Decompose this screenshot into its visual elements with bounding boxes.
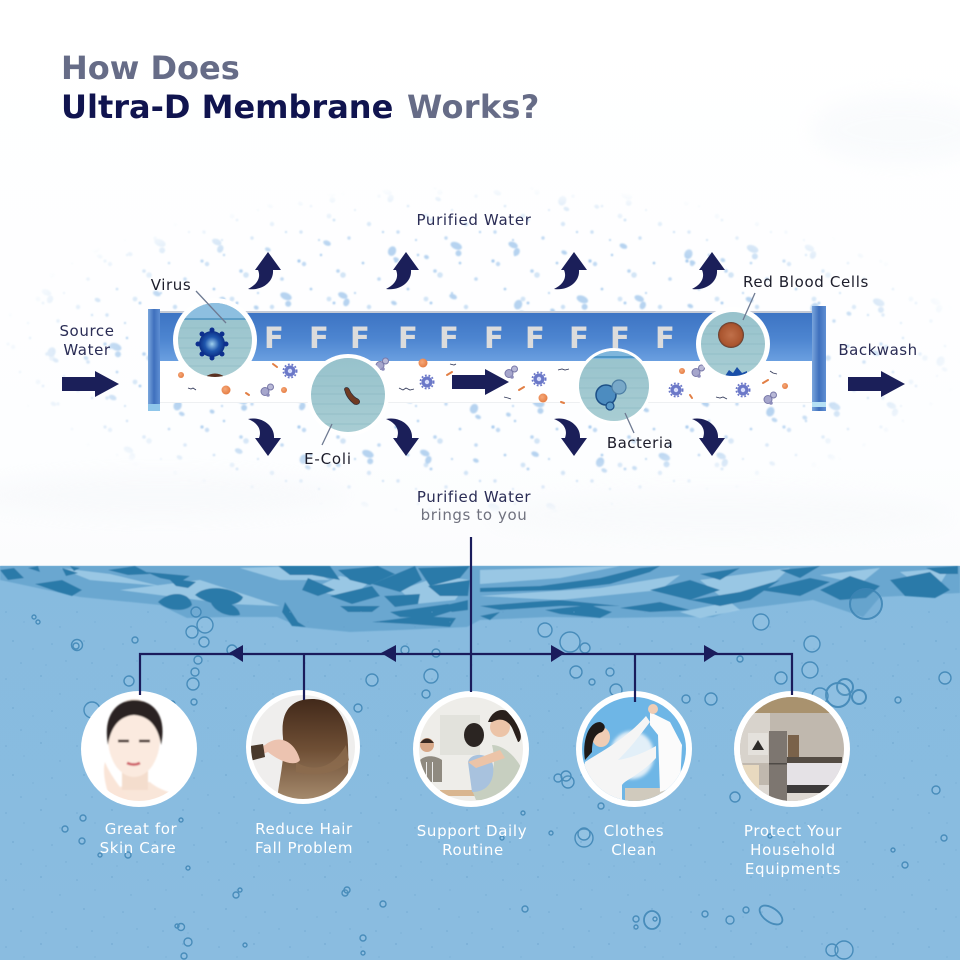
caption: support daily routine: Support Daily bbox=[417, 822, 527, 840]
label: source water: Source bbox=[59, 322, 115, 340]
caption: support daily routine: Routine bbox=[442, 841, 504, 859]
membrane F markers: F bbox=[525, 321, 545, 355]
magnifier: e-coli bbox=[307, 354, 389, 436]
caption: clothes clean: Clean bbox=[611, 841, 657, 859]
membrane F markers: F bbox=[398, 321, 418, 355]
label: source water bbox=[59, 322, 115, 359]
membrane F markers bbox=[264, 321, 675, 355]
caption: protect your household equipments bbox=[744, 822, 842, 878]
water micro speckles bbox=[0, 610, 960, 960]
label: e-coli: E-Coli bbox=[304, 450, 352, 468]
photo: clothes clean bbox=[576, 691, 692, 807]
water bubbles bbox=[32, 589, 951, 959]
caption: protect your household equipments: Household bbox=[750, 841, 836, 859]
caption: clothes clean bbox=[604, 822, 664, 859]
membrane F markers: F bbox=[569, 321, 589, 355]
membrane F markers: F bbox=[610, 321, 630, 355]
photo: hair bbox=[246, 690, 360, 804]
label: red blood cells: Red Blood Cells bbox=[743, 273, 869, 291]
label: virus: Virus bbox=[151, 276, 191, 294]
background: water spray droplets bbox=[0, 180, 960, 520]
caption: great for skin care bbox=[100, 820, 178, 857]
background: white sky bbox=[0, 0, 960, 566]
label: purified water top: Purified Water bbox=[416, 211, 532, 229]
caption: reduce hair fall problem bbox=[255, 820, 353, 857]
arrow: source water in bbox=[62, 371, 119, 397]
photo: kitchen household equipment bbox=[734, 691, 850, 807]
caption: reduce hair fall problem: Fall Problem bbox=[255, 839, 353, 857]
arrow: centre flow bbox=[452, 369, 509, 395]
leader lines bbox=[196, 291, 755, 445]
distribution tree connector bbox=[140, 537, 792, 702]
arrows: purified water upward bbox=[248, 252, 725, 289]
magnifier: virus bbox=[173, 298, 257, 382]
membrane tube bbox=[148, 306, 826, 411]
title bbox=[61, 49, 540, 126]
label: bacteria: Bacteria bbox=[607, 434, 673, 452]
title: Works? bbox=[407, 88, 540, 126]
background: water body bbox=[0, 566, 960, 960]
label: purified water brings to you bbox=[417, 488, 531, 524]
membrane F markers: F bbox=[439, 321, 459, 355]
water surface waves bbox=[0, 566, 960, 632]
caption: protect your household equipments: Protect Your bbox=[744, 822, 842, 840]
caption: reduce hair fall problem: Reduce Hair bbox=[255, 820, 353, 838]
background: pale water haze bbox=[0, 95, 960, 539]
arrows: purified water downward bbox=[248, 418, 725, 456]
membrane F markers: F bbox=[264, 321, 284, 355]
contaminants inside tube bbox=[178, 358, 788, 405]
membrane F markers: F bbox=[309, 321, 329, 355]
label: purified water brings to you: Purified Water bbox=[417, 488, 531, 506]
label: purified water brings to you: brings to you bbox=[421, 506, 527, 524]
arrow: backwash out bbox=[848, 371, 905, 397]
caption: clothes clean: Clothes bbox=[604, 822, 664, 840]
caption: support daily routine bbox=[417, 822, 527, 859]
title: How Does bbox=[61, 49, 240, 87]
title: Ultra-D Membrane bbox=[61, 88, 393, 126]
label: source water: Water bbox=[63, 341, 111, 359]
membrane F markers: F bbox=[350, 321, 370, 355]
caption: protect your household equipments: Equipments bbox=[745, 860, 841, 878]
photo: family daily routine bbox=[413, 691, 529, 807]
caption: great for skin care: Great for bbox=[105, 820, 178, 838]
magnifier: red blood cells bbox=[696, 311, 770, 376]
photo: skin care bbox=[81, 691, 197, 815]
caption: great for skin care: Skin Care bbox=[100, 839, 176, 857]
magnifier: bacteria bbox=[579, 348, 649, 423]
label: backwash: Backwash bbox=[838, 341, 918, 359]
membrane F markers: F bbox=[655, 321, 675, 355]
membrane F markers: F bbox=[484, 321, 504, 355]
